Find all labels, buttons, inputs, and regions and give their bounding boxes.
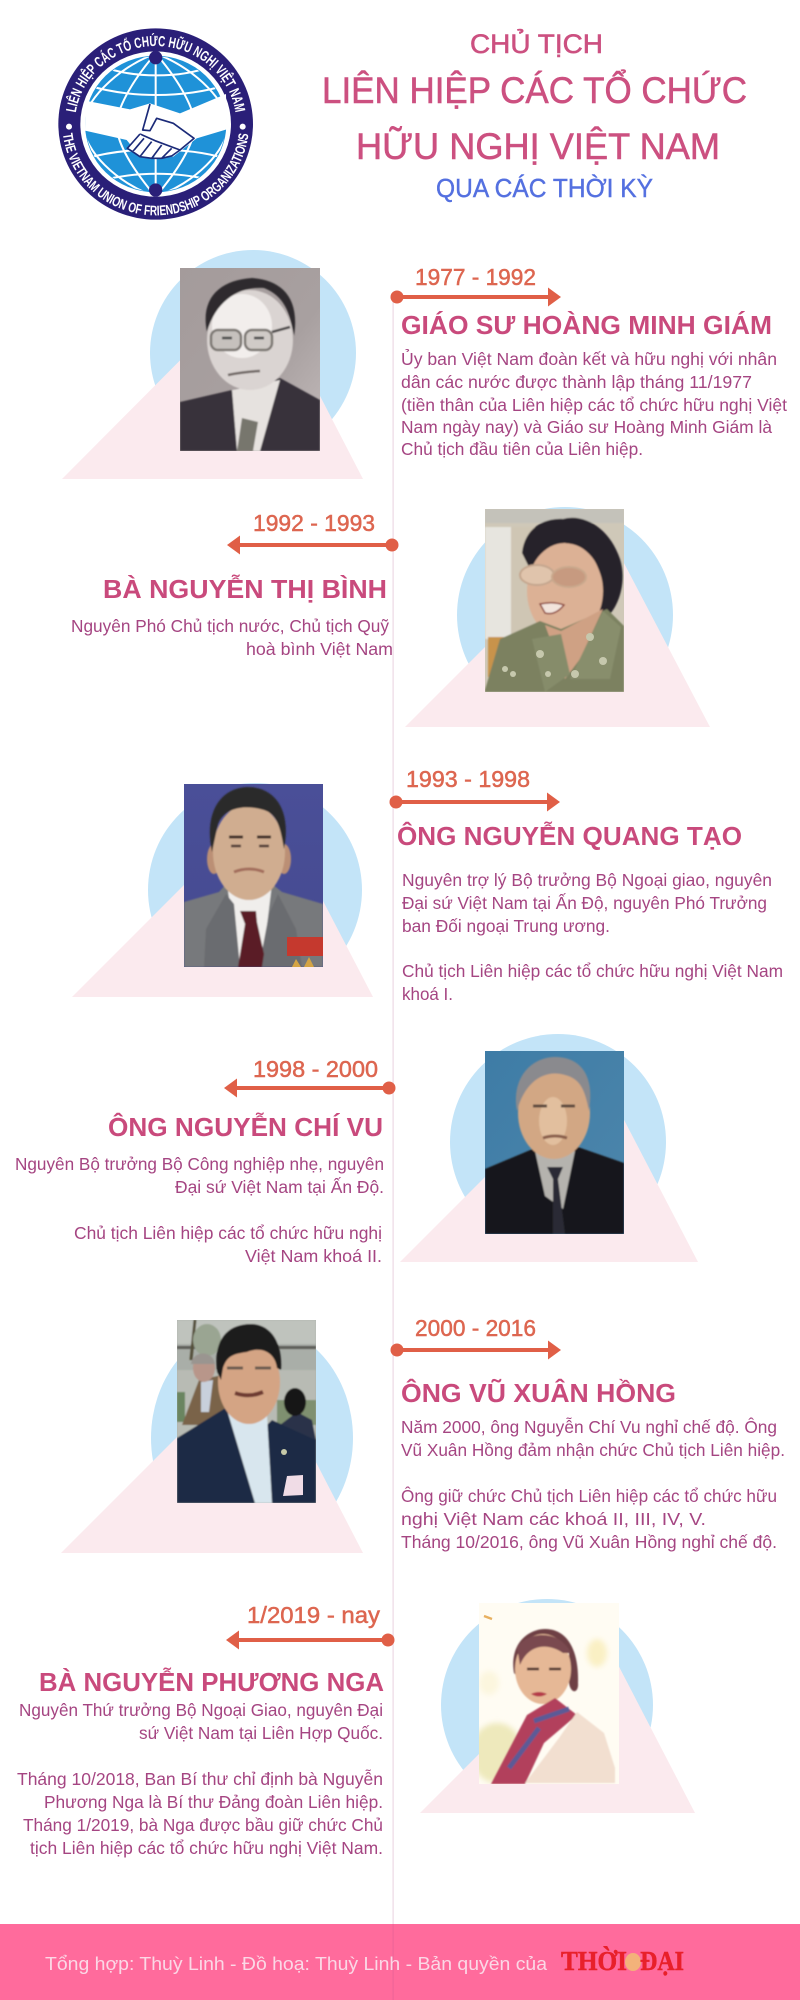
biography text: Chủ tịch đầu tiên của Liên hiệp. — [401, 439, 643, 459]
entry 1: Hoàng Minh Giám — [62, 250, 787, 479]
timeline arrow and year 1/2019-nay: 1/2019 - nay — [247, 1602, 381, 1628]
biography text: Việt Nam khoá II. — [245, 1246, 382, 1266]
name heading: ÔNG NGUYỄN QUANG TẠO — [397, 821, 742, 851]
entry 4: Nguyễn Chí Vu — [15, 1034, 698, 1266]
biography text: Tháng 10/2016, ông Vũ Xuân Hồng nghỉ chế độ. — [401, 1532, 777, 1552]
timeline arrow and year 2000-2016: 2000 - 2016 — [415, 1315, 536, 1341]
header: title block — [322, 27, 747, 203]
biography text: tịch Liên hiệp các tổ chức hữu nghị Việt Nam. — [30, 1838, 383, 1858]
biography text: ban Đối ngoại Trung ương. — [402, 916, 610, 936]
header: organisation logo — [58, 28, 253, 220]
biography text: (tiền thân của Liên hiệp các tổ chức hữu nghị Việt — [401, 395, 787, 415]
entry 3: Nguyễn Quang Tạo — [72, 766, 783, 1004]
entry 2: Nguyễn Thị Bình — [71, 507, 710, 727]
timeline arrow and year 1993-1998: 1993 - 1998 — [406, 766, 530, 792]
name heading: GIÁO SƯ HOÀNG MINH GIÁM — [401, 311, 772, 340]
timeline arrow and year 1993-1998 — [390, 766, 560, 812]
portrait group 1 — [62, 250, 363, 479]
biography text: Vũ Xuân Hồng đảm nhận chức Chủ tịch Liên hiệp. — [401, 1440, 785, 1460]
entry 6: Nguyễn Phương Nga — [17, 1599, 695, 1858]
header: title block: CHỦ TỊCH — [470, 27, 603, 59]
biography text: Năm 2000, ông Nguyễn Chí Vu nghỉ chế độ. Ông — [401, 1416, 777, 1437]
biography text: Nguyên Bộ trưởng Bộ Công nghiệp nhẹ, nguyên — [15, 1154, 384, 1174]
biography text — [15, 1154, 384, 1266]
portrait group 5 — [61, 1320, 363, 1553]
timeline vertical line — [392, 297, 394, 2000]
biography text: Nguyên Thứ trưởng Bộ Ngoại Giao, nguyên Đại — [19, 1700, 383, 1720]
biography text — [401, 348, 787, 459]
entry 5: Vũ Xuân Hồng — [61, 1315, 785, 1553]
timeline arrow and year 1998-2000 — [224, 1056, 396, 1098]
biography text: dân các nước được thành lập tháng 11/1977 — [401, 372, 752, 392]
biography text: Nam ngày nay) và Giáo sư Hoàng Minh Giám là — [401, 417, 772, 437]
Thời Đại wordmark — [561, 1946, 684, 1976]
timeline arrow and year 1992-1993 — [227, 510, 398, 554]
biography text: Đại sứ Việt Nam tại Ấn Độ, nguyên Phó Trưởng — [402, 892, 767, 913]
portrait group 3 — [72, 783, 373, 997]
biography text: hoà bình Việt Nam — [246, 639, 393, 659]
biography text: Ủy ban Việt Nam đoàn kết và hữu nghị với nhân — [401, 348, 777, 369]
header: organisation logo: THE VIETNAM UNION OF FRIENDSHIP ORGANIZATIONS — [63, 132, 248, 216]
timeline arrow and year 1977-1992: 1977 - 1992 — [415, 264, 536, 290]
biography text: Chủ tịch Liên hiệp các tổ chức hữu nghị Việt Nam — [402, 961, 783, 981]
portrait group 2 — [405, 507, 710, 727]
name heading: BÀ NGUYỄN THỊ BÌNH — [103, 574, 387, 604]
header: title block: HỮU NGHỊ VIỆT NAM — [356, 126, 720, 167]
timeline arrow and year 2000-2016 — [390, 1315, 561, 1360]
biography text: Nguyên Phó Chủ tịch nước, Chủ tịch Quỹ — [71, 616, 389, 636]
biography text: sứ Việt Nam tại Liên Hợp Quốc. — [139, 1723, 383, 1743]
biography text: Ông giữ chức Chủ tịch Liên hiệp các tổ chức hữu — [401, 1485, 777, 1506]
Thời Đại wordmark: THỜI — [561, 1946, 627, 1976]
biography text — [71, 616, 393, 659]
name heading: BÀ NGUYỄN PHƯƠNG NGA — [39, 1667, 384, 1697]
biography text: Đại sứ Việt Nam tại Ấn Độ. — [175, 1176, 384, 1197]
Thời Đại wordmark: ĐẠI — [640, 1946, 684, 1976]
header: organisation logo: LIÊN HIỆP CÁC TỔ CHỨC HỮU NGHỊ VIỆT NAM — [66, 33, 246, 112]
biography text: Nguyên trợ lý Bộ trưởng Bộ Ngoại giao, nguyên — [402, 870, 772, 890]
biography text: Chủ tịch Liên hiệp các tổ chức hữu nghị — [74, 1223, 382, 1243]
footer band — [0, 1924, 800, 2000]
timeline arrow and year 1977-1992 — [390, 264, 561, 306]
timeline arrow and year 1992-1993: 1992 - 1993 — [253, 510, 375, 536]
biography text — [402, 870, 783, 1004]
biography text: khoá I. — [402, 984, 453, 1004]
biography text — [401, 1416, 785, 1552]
timeline arrow and year 1998-2000: 1998 - 2000 — [253, 1056, 378, 1082]
biography text: nghị Việt Nam các khoá II, III, IV, V. — [401, 1509, 706, 1529]
header: title block: QUA CÁC THỜI KỲ — [436, 173, 653, 203]
biography text: Tháng 1/2019, bà Nga được bầu giữ chức Chủ — [23, 1815, 383, 1835]
name heading: ÔNG NGUYỄN CHÍ VU — [108, 1112, 383, 1142]
name heading: ÔNG VŨ XUÂN HỒNG — [401, 1378, 676, 1408]
header: title block: LIÊN HIỆP CÁC TỔ CHỨC — [322, 68, 747, 111]
biography text: Tháng 10/2018, Ban Bí thư chỉ định bà Nguyễn — [17, 1768, 383, 1789]
footer credits: Tổng hợp: Thuỳ Linh - Đồ hoạ: Thuỳ Linh - Bản quyền của — [45, 1954, 548, 1974]
portrait group 4 — [400, 1034, 698, 1262]
portrait group 6 — [420, 1599, 695, 1813]
biography text — [17, 1700, 383, 1858]
biography text: Phương Nga là Bí thư Đảng đoàn Liên hiệp. — [44, 1792, 383, 1812]
timeline arrow and year 1/2019-nay — [226, 1602, 394, 1650]
